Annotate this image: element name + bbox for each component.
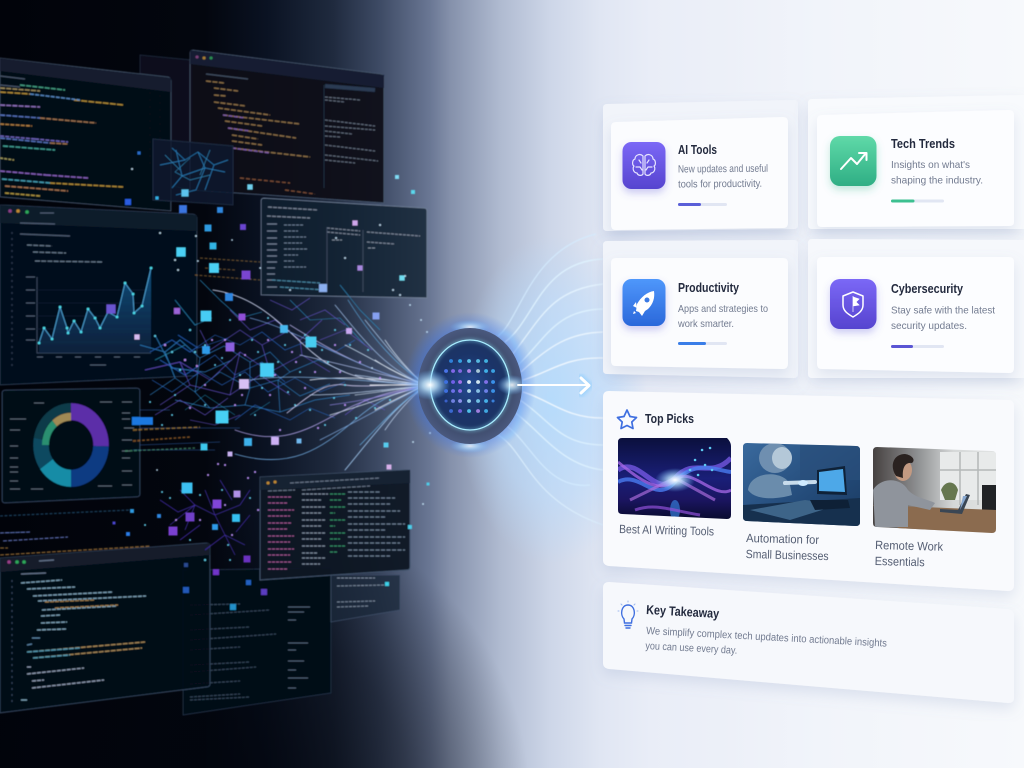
data network: flow lines converging on the core <box>213 290 424 470</box>
description: Cybersecurity: security updates. <box>891 320 967 332</box>
window: top left code editor <box>0 58 171 211</box>
panel: Tech Trends <box>808 95 1024 229</box>
description: AI Tools <box>678 163 768 190</box>
icon: brain <box>622 142 666 189</box>
description: Productivity <box>677 303 768 330</box>
caption: Automation for Small Businesses: Automation for <box>746 531 819 547</box>
window: back lower panel <box>183 568 331 715</box>
icon: rocket <box>622 279 666 326</box>
description: Cybersecurity: Stay safe with the latest <box>891 304 995 316</box>
caption: Automation for Small Businesses <box>746 531 829 563</box>
description: Productivity: work smarter. <box>677 318 734 330</box>
description: Tech Trends: shaping the industry. <box>891 174 983 186</box>
progress bar: Cybersecurity <box>891 345 944 348</box>
panel: Key Takeaway <box>603 582 1014 703</box>
description: Cybersecurity <box>891 304 995 332</box>
window: right data table panel <box>261 198 427 298</box>
core dot matrix <box>446 361 493 411</box>
panel: Productivity <box>603 240 798 378</box>
description: Tech Trends: Insights on what's <box>891 159 970 171</box>
central core orb <box>404 312 536 458</box>
dark shading toward lower left <box>0 0 540 768</box>
description: Key Takeaway: We simplify complex tech updates into actionable insights <box>646 625 887 650</box>
icon: star <box>618 410 636 428</box>
image: robot with computer <box>742 442 862 528</box>
left panel: dark dashboards and data network <box>0 50 430 715</box>
heading: Cybersecurity: Cybersecurity <box>891 281 964 296</box>
progress bar: Tech Trends <box>891 200 944 202</box>
window: back right lower panel <box>331 575 400 622</box>
description: Key Takeaway: you can use every day. <box>645 640 738 657</box>
chart: donut <box>38 408 101 478</box>
data network: small nodes <box>132 169 430 560</box>
light glow behind the flow lines <box>457 235 647 565</box>
description: Productivity: Apps and strategies to <box>678 303 768 315</box>
icon: shield <box>830 279 876 329</box>
panel: Top Picks <box>603 391 1014 591</box>
heading: Top Picks: Top Picks <box>645 411 694 426</box>
data network: cyan and blue nodes <box>125 152 430 610</box>
window: donut chart dashboard <box>2 388 140 503</box>
panel: AI Tools <box>603 100 798 231</box>
data network: tangled links <box>125 258 385 555</box>
window: bottom left code editor <box>0 543 210 713</box>
heading: AI Tools: AI Tools <box>678 142 717 157</box>
window: line chart dashboard <box>0 205 197 385</box>
caption: Automation for Small Businesses: Small Businesses <box>746 547 829 563</box>
flow lines: core to cards <box>498 234 603 525</box>
progress bar: Productivity <box>678 342 727 345</box>
panel: Cybersecurity <box>808 239 1024 378</box>
description: Key Takeaway <box>645 625 887 665</box>
window: dark data table <box>260 470 410 580</box>
arrow from core to cards <box>518 377 590 394</box>
description: Tech Trends <box>891 159 983 186</box>
window: top centre code editor <box>190 50 384 203</box>
image: abstract AI waves <box>618 436 732 521</box>
heading: Key Takeaway: Key Takeaway <box>646 602 720 621</box>
progress bar: AI Tools <box>678 203 727 206</box>
caption: Best AI Writing Tools: Best AI Writing Tools <box>619 522 714 538</box>
window: blue network panel <box>153 139 233 205</box>
caption: Remote Work Essentials: Remote Work <box>875 538 944 554</box>
heading: Productivity: Productivity <box>678 280 740 295</box>
heading: Tech Trends: Tech Trends <box>891 136 955 151</box>
icon: trend arrow <box>830 136 876 186</box>
image: person at laptop <box>872 446 997 534</box>
description: AI Tools: New updates and useful <box>678 163 768 175</box>
chart: area line chart <box>26 268 151 365</box>
data network: purple and lilac nodes <box>106 220 392 595</box>
description: AI Tools: tools for productivity. <box>678 178 762 190</box>
window: faint lower code block <box>0 510 150 555</box>
caption: Remote Work Essentials <box>875 538 944 570</box>
caption: Remote Work Essentials: Essentials <box>875 554 925 569</box>
window: back panel behind top code <box>140 55 192 190</box>
icon: light bulb <box>618 601 638 628</box>
